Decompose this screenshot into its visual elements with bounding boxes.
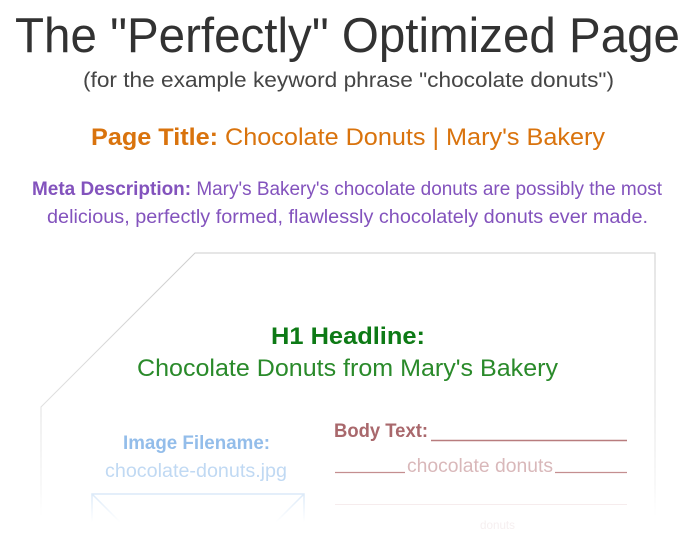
meta description: delicious, perfectly formed, flawlessly chocolately donuts ever made.: [47, 207, 648, 228]
image filename label: chocolate-donuts.jpg: [105, 461, 287, 482]
body text: Body Text:: [334, 421, 428, 442]
image filename label: Image Filename:: [123, 433, 270, 454]
image filename label: [105, 433, 287, 482]
subtitle: (for the example keyword phrase "chocolate donuts"): [83, 69, 614, 92]
meta description: Meta Description: Mary's Bakery's chocolate donuts are possibly the most: [32, 179, 663, 200]
image placeholder: [92, 494, 304, 527]
body text: [334, 421, 627, 504]
page title: Page Title: Chocolate Donuts | Mary's Bakery: [91, 124, 605, 151]
page outline: [41, 253, 655, 515]
meta description: [32, 179, 663, 228]
h1 headline: [137, 323, 558, 382]
faded body keyword: donuts: [480, 518, 515, 532]
title: The "Perfectly" Optimized Page: [15, 9, 680, 63]
h1 headline: Chocolate Donuts from Mary's Bakery: [137, 355, 558, 382]
h1 headline: H1 Headline:: [271, 323, 425, 350]
bottom fade: [0, 488, 700, 533]
body text: chocolate donuts: [407, 456, 553, 477]
